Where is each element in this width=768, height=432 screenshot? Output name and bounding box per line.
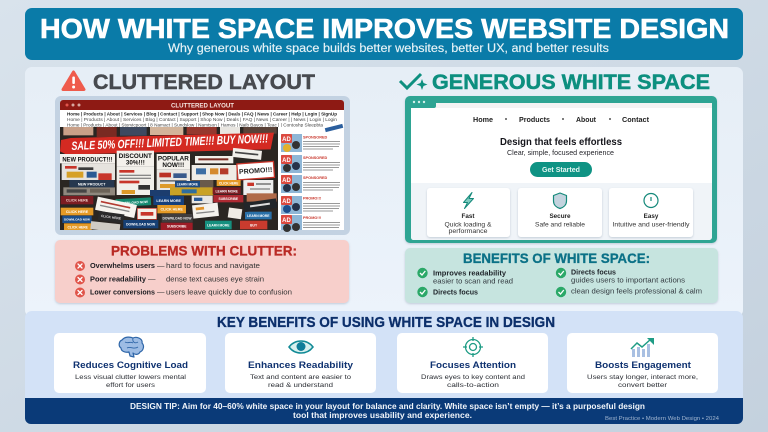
heading: generous white space: GENEROUS WHITE SPACE — [432, 70, 710, 94]
problem 3 — [75, 287, 292, 298]
clean nav: About — [576, 115, 596, 124]
ad labels: LEARN MORE — [215, 189, 239, 193]
ad labels: PROMO!!! — [239, 167, 273, 176]
heading: key benefits: KEY BENEFITS OF USING WHITE SPACE IN DESIGN — [217, 315, 555, 331]
ad 5: AD — [282, 218, 291, 224]
ad 5: PROMO!!! — [303, 216, 321, 220]
title banner — [25, 8, 743, 60]
card: enhances readability: Enhances Readability — [248, 360, 354, 371]
ad labels: CLICK HERE — [219, 182, 238, 186]
icon: rising chart — [631, 338, 654, 357]
problem 2: — — [148, 274, 156, 283]
clean nav: Products — [519, 115, 550, 124]
card: reduces cognitive load: Reduces Cognitive Load — [73, 360, 188, 371]
ad labels: LEARN MORE — [177, 183, 198, 187]
ad labels: NOW!!! — [162, 162, 184, 169]
card: enhances readability: Text and content are easier to — [250, 374, 351, 381]
clean nav: Contact — [622, 115, 649, 124]
ad labels: DOWNLOAD NOW — [64, 218, 90, 222]
clean nav — [473, 115, 649, 124]
icon: target — [463, 337, 483, 357]
ad labels: DOWNLOAD NOW — [162, 217, 192, 221]
card: focuses attention: Draws eyes to key content and — [421, 374, 525, 381]
ad 3: AD — [282, 178, 291, 184]
icon: check with sparkle — [400, 74, 428, 90]
credit: Best Practice • Modern Web Design • 2024 — [605, 416, 719, 422]
card: boosts engagement: Users stay longer, interact more, — [587, 374, 698, 381]
icon: warning triangle — [63, 72, 84, 90]
ad labels: 30%!!! — [126, 159, 145, 166]
ad labels: DOWNLOAD NOW — [126, 223, 156, 227]
tip text: tool that improves usability and experience. — [293, 411, 472, 420]
ad labels: CLICK HERE — [66, 210, 89, 214]
benefit: guides users — [556, 268, 685, 284]
ad labels: LEARN MORE — [156, 199, 182, 203]
ad 4 — [281, 196, 340, 214]
icon: eye — [289, 341, 313, 353]
card: reduces cognitive load: Less visual clutter lowers mental — [75, 374, 187, 381]
clean nav: Home — [473, 115, 493, 124]
feature card: fast: performance — [448, 228, 488, 235]
ad labels: DOWNLOAD NOW — [119, 200, 149, 205]
problem 2: Poor readability — [90, 274, 147, 283]
feature card: fast: Fast — [462, 213, 475, 220]
hero heading: Design that feels effortless — [500, 136, 622, 148]
ad 1: AD — [282, 137, 291, 143]
problem 1: hard to focus and navigate — [166, 261, 260, 270]
tip text: DESIGN TIP: Aim for 40–60% white space in your layout for balance and clarity. White space isn’t empty — it’s a purposeful design — [130, 402, 645, 411]
card: focuses attention: Focuses Attention — [430, 360, 516, 371]
feature card: easy: Intuitive and user-friendly — [612, 222, 690, 229]
comparison panel background — [25, 67, 743, 317]
design tip bar — [25, 398, 743, 424]
heading: problems: PROBLEMS WITH CLUTTER: — [111, 243, 297, 259]
card: focuses attention — [397, 333, 548, 393]
ad labels — [60, 148, 277, 232]
ad labels: NEW PRODUCT — [78, 182, 106, 186]
ad labels: CLICK HERE — [66, 199, 89, 203]
sponsored ads column — [278, 127, 344, 232]
benefit: improves readability — [417, 268, 513, 285]
card: reduces cognitive load — [54, 333, 206, 393]
ad 2: SPONSORED — [303, 156, 328, 160]
browser title bar — [60, 100, 344, 110]
card: reduces cognitive load: effort for users — [106, 382, 156, 389]
ad labels: CLICK HERE — [101, 214, 122, 221]
ad 3: SPONSORED — [303, 176, 328, 180]
clean browser mockup — [405, 96, 717, 243]
hero subtitle: Clear, simple, focused experience — [507, 148, 614, 157]
call to action button — [530, 162, 592, 177]
feature strip — [411, 183, 712, 240]
title: HOW WHITE SPACE IMPROVES WEBSITE DESIGN — [40, 13, 729, 44]
banner: sale: SALE 50% OFF!!! LIMITED TIME!!! BUY NOW!!! — [71, 131, 268, 153]
problem 3: users leave quickly due to confusion — [166, 287, 292, 296]
subtitle: Why generous white space builds better websites, better UX, and better results — [168, 43, 609, 55]
problem 1: Overwhelms users — [90, 261, 155, 270]
cluttered nav rows: Home | Products | About | Services | Blog | Contact | Support | Shop Now | Deals | FAQ | News | Career | Help | Login | SignUp — [67, 112, 337, 117]
feature card: easy — [609, 188, 693, 237]
ad labels: SUBSCRIBE — [167, 225, 187, 229]
feature card: fast: Quick loading & — [444, 222, 492, 229]
ad labels: NEW PRODUCT!!! — [62, 156, 112, 163]
problem 3: — — [157, 287, 165, 296]
cluttered nav rows — [67, 112, 338, 127]
card: enhances readability — [225, 333, 376, 393]
ad 4: PROMO!!! — [303, 196, 321, 200]
problem 1: — — [157, 261, 165, 270]
ad labels: SUBSCRIBE — [219, 197, 239, 201]
problem 2 — [75, 274, 264, 284]
browser title bar: CLUTTERED LAYOUT — [171, 102, 234, 109]
feature card: fast — [427, 188, 510, 237]
ad 1: SPONSORED — [303, 136, 328, 140]
tip text — [130, 402, 645, 420]
card: focuses attention: calls-to-action — [447, 382, 499, 389]
card: enhances readability: read & understand — [268, 382, 333, 389]
card: boosts engagement: convert better — [618, 382, 668, 389]
panel: cluttered layout — [55, 70, 350, 303]
cluttered browser mockup — [55, 96, 350, 235]
ad 2: AD — [282, 158, 291, 164]
ad labels: DISCOUNT — [119, 153, 152, 160]
ad 1 — [281, 134, 340, 152]
ad labels: LEARN MORE — [247, 214, 270, 218]
benefit: guides users: Directs focus — [571, 268, 616, 277]
corner ribbon — [325, 124, 343, 132]
heading: benefits: BENEFITS OF WHITE SPACE: — [463, 250, 650, 266]
cluttered nav rows: Home | Products | About | Storvicpoort | 8 Namact | Sundslow | Namtson | Hamos | Naib Bayos | Teac | | Contoshp Sleepbta — [67, 122, 324, 127]
benefit: improves readability: Improves readability — [433, 269, 507, 278]
ad labels: CLICK HERE — [67, 225, 89, 229]
ad labels: BUY — [250, 223, 258, 227]
problem 3: Lower conversions — [90, 287, 155, 296]
cluttered nav rows: Home | Products | About | Services | Blog | Contact | Support | Shop Now | Deals | FAQ | News | Career | | News | Login | Login — [67, 117, 338, 122]
benefit: clean design: clean design feels professional & calm — [571, 287, 702, 296]
ad 2 — [281, 155, 340, 173]
icon: brain — [119, 337, 143, 357]
problem 1 — [75, 261, 260, 271]
panel: generous white space — [400, 70, 718, 303]
feature card: easy: Easy — [644, 213, 659, 220]
card: boosts engagement — [567, 333, 718, 393]
banner: sale — [60, 131, 274, 155]
ad labels: LEARN MORE — [207, 223, 230, 227]
benefit: directs focus — [417, 287, 478, 297]
icon: circle dial — [644, 194, 658, 208]
ad labels: POPULAR — [158, 156, 189, 163]
panel: benefits of white space — [405, 248, 718, 303]
feature card: secure — [518, 188, 602, 237]
call to action button: Get Started — [542, 165, 580, 174]
ad 5 — [281, 215, 340, 232]
ad 4: AD — [282, 199, 291, 205]
problem 2: dense text causes eye strain — [166, 274, 264, 283]
icon: shield — [554, 193, 566, 208]
ad collage — [60, 127, 278, 232]
panel: key benefits — [25, 311, 743, 399]
benefit: improves readability: easier to scan and read — [433, 276, 513, 285]
icon: bolt — [464, 192, 474, 208]
card: boosts engagement: Boosts Engagement — [595, 360, 692, 371]
heading: cluttered layout: CLUTTERED LAYOUT — [93, 70, 315, 94]
benefit: directs focus: Directs focus — [433, 288, 478, 297]
panel: problems with clutter — [55, 240, 349, 303]
feature card: secure: Safe and reliable — [535, 222, 585, 229]
ad labels: CLICK HERE — [160, 208, 183, 212]
ad 3 — [281, 175, 340, 193]
feature card: secure: Secure — [549, 213, 571, 220]
benefit: guides users: guides users to important actions — [571, 275, 685, 284]
